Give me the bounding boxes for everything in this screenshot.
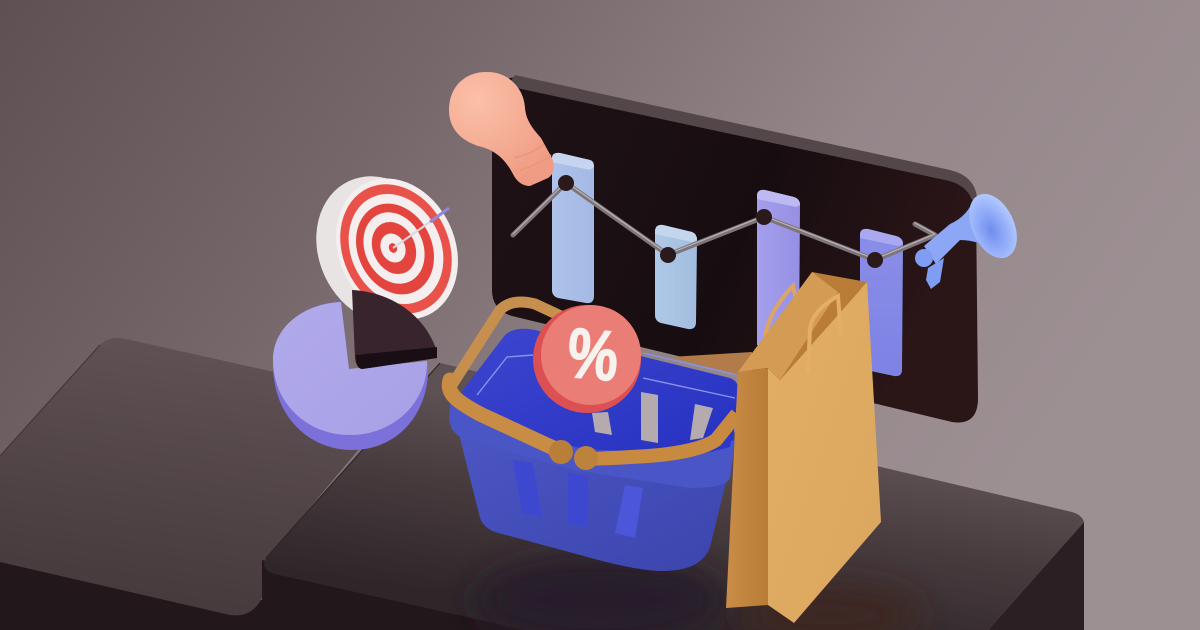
arrow in target: [393, 208, 449, 248]
basket inner: [450, 329, 738, 470]
pie chart: [273, 290, 437, 450]
shopping basket: [449, 302, 752, 571]
platform: right block: [262, 363, 1084, 630]
icon: megaphone: [915, 186, 1026, 289]
shopping bag: [726, 272, 881, 623]
bar 1: [552, 153, 594, 303]
platform: left block: [0, 338, 400, 630]
basket holes: [513, 460, 542, 517]
front handle: [808, 296, 841, 372]
trend line with pins: [513, 175, 935, 268]
basket rim: [449, 404, 735, 488]
chart board: [492, 75, 978, 422]
bar 4: [860, 229, 903, 376]
percent sign: %: [564, 313, 622, 396]
bar chart on board: [552, 153, 903, 376]
pie slice: [352, 290, 437, 369]
inner windows: [592, 412, 612, 435]
bar 2: [655, 225, 697, 329]
back handle: [765, 286, 798, 338]
front handle: [449, 380, 562, 452]
basket body: [458, 430, 730, 571]
bar 3: [757, 190, 800, 350]
icon: light bulb: [449, 72, 554, 186]
discount badge: [533, 305, 641, 413]
back handle: [450, 302, 565, 388]
icon: target: [293, 155, 480, 345]
